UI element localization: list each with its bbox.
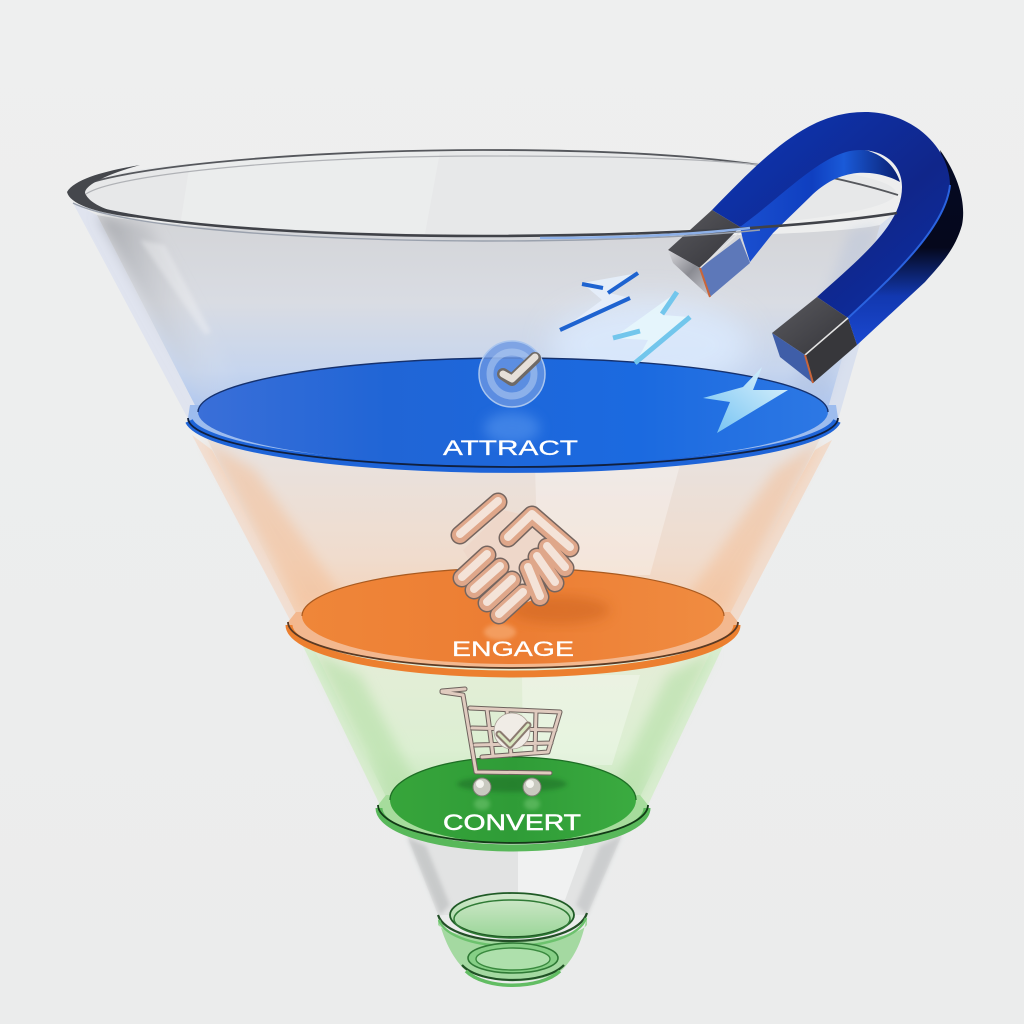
front rim [67, 165, 897, 241]
icon: shopping cart [442, 689, 560, 796]
disc: engage level [288, 568, 738, 674]
magnet: blue top face [712, 112, 950, 318]
label: attract: ATTRACT [443, 437, 578, 460]
icon: handshake [460, 501, 570, 615]
magnet [668, 112, 963, 383]
section: attract glass wall [97, 215, 880, 415]
label: convert: CONVERT [443, 810, 581, 835]
section: convert glass wall [312, 645, 714, 805]
bolt: cyan middle [613, 292, 690, 364]
green spout [438, 893, 587, 985]
magnet: pole right [772, 297, 857, 383]
section: engage glass wall [205, 435, 822, 625]
disc: convert level [378, 757, 648, 848]
magnet: outer dark side [848, 150, 963, 345]
rim interior and back rim [68, 150, 898, 235]
funnel outer glass edges [73, 203, 898, 805]
bolt: bright lower [703, 367, 788, 433]
label: engage: ENGAGE [452, 638, 574, 661]
disc: attract level [188, 358, 838, 469]
magnet: inner reflective side [740, 149, 900, 262]
icon: check bubble [479, 341, 545, 407]
bolt: outlined upper [560, 273, 638, 331]
section: lower funnel neck [407, 835, 622, 915]
magnet: pole left [668, 210, 750, 297]
icon: lightning bolts [560, 273, 788, 433]
